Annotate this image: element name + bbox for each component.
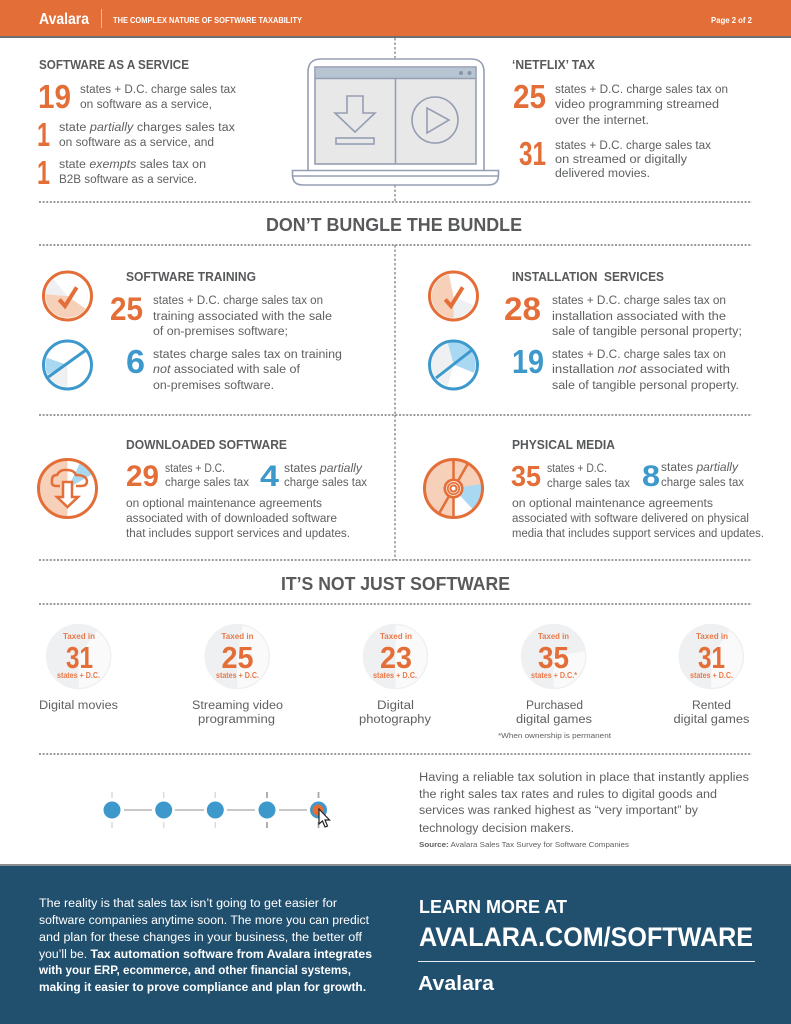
panel: software training: on-premises software. [153, 380, 274, 392]
call to action: AVALARA.COM/SOFTWARE [419, 922, 753, 952]
panel: software training: states + D.C. charge sales tax on [153, 295, 323, 307]
panel: physical media: 8 [642, 460, 660, 493]
panel: downloaded software: associated with of downloaded software [126, 513, 337, 525]
footer paragraph: you’ll be. Tax automation software from Avalara integrates [39, 949, 372, 961]
stat: streaming video programming: programming [198, 714, 275, 726]
footer logo: Avalara [418, 973, 495, 995]
text block: survey finding: services was ranked highest as “very important” by [419, 805, 698, 817]
panel: netflix tax [512, 58, 728, 180]
panel: physical media: PHYSICAL MEDIA [512, 438, 615, 452]
stat: streaming video programming [192, 624, 283, 726]
panel: downloaded software: states partially [284, 463, 363, 475]
panel: installation services: 19 [512, 343, 544, 380]
panel: installation services: sale of tangible personal property; [552, 326, 742, 338]
stat: purchased digital games: states + D.C.* [531, 670, 578, 680]
stat: digital photography [359, 624, 431, 726]
panel: software training: 6 [126, 343, 145, 380]
stat: rented digital games: Rented [692, 700, 731, 712]
footnote: *When ownership is permanent [498, 731, 612, 740]
stat: digital movies: states + D.C. [57, 670, 100, 680]
stat: rented digital games [674, 624, 750, 726]
stat: purchased digital games: digital games [516, 714, 592, 726]
panel: netflix tax: states + D.C. charge sales tax on [555, 84, 728, 96]
panel: software as a service: 1 [37, 155, 50, 192]
stat: streaming video programming: 25 [222, 640, 254, 675]
panel: installation services: states + D.C. charge sales tax on [552, 349, 726, 361]
panel: netflix tax: over the internet. [555, 115, 649, 127]
call to action [418, 896, 755, 962]
icon: selection dots with cursor [104, 792, 330, 828]
text block: survey finding: technology decision makers. [419, 823, 574, 835]
panel: downloaded software: charge sales tax [284, 477, 367, 489]
panel: software as a service: state exempts sales tax on [59, 159, 206, 171]
panel: installation services: installation not associated with [552, 364, 730, 376]
panel: physical media: on optional maintenance agreements [512, 498, 713, 510]
icon: not taxed pie with slash [430, 341, 478, 389]
stat: digital photography: photography [359, 714, 431, 726]
stat: rented digital games: states + D.C. [690, 670, 733, 680]
icon: taxed pie with check [44, 272, 92, 320]
icon: laptop with download and play [292, 59, 498, 185]
header logo: Avalara [39, 11, 89, 28]
panel: physical media: associated with software delivered on physical [512, 513, 749, 525]
stat: rented digital games: digital games [674, 714, 750, 726]
panel: installation services: 28 [504, 291, 541, 327]
stat: streaming video programming: Taxed in [222, 631, 254, 641]
panel: software training: SOFTWARE TRAINING [126, 270, 256, 284]
panel: installation services: installation associated with the [552, 311, 726, 323]
footer paragraph: and plan for these changes in your business, the better off [39, 932, 363, 944]
panel: downloaded software: on optional maintenance agreements [126, 498, 322, 510]
panel: physical media: states + D.C. [547, 463, 607, 475]
panel: physical media: media that includes support services and updates. [512, 528, 764, 540]
panel: downloaded software [38, 438, 367, 540]
stat: digital photography: Taxed in [380, 631, 412, 641]
heading: don't bungle the bundle: DON’T BUNGLE THE BUNDLE [266, 214, 522, 235]
panel: netflix tax: 31 [519, 136, 546, 173]
stat: streaming video programming: Streaming video [192, 700, 283, 712]
panel: physical media: states partially [661, 462, 739, 474]
stat: purchased digital games [498, 624, 612, 740]
stat: digital photography: states + D.C. [373, 670, 417, 680]
panel: downloaded software: charge sales tax [165, 477, 249, 489]
panel: downloaded software: states + D.C. [165, 463, 225, 475]
text block: survey finding [419, 772, 749, 849]
panel: software as a service: B2B software as a service. [59, 174, 197, 186]
panel: software as a service: states + D.C. charge sales tax [80, 84, 236, 96]
stat: digital movies: 31 [66, 640, 93, 675]
stat: rented digital games: 31 [698, 640, 725, 675]
panel: software as a service: on software as a service, and [59, 137, 214, 149]
panel: netflix tax: video programming streamed [555, 99, 719, 111]
stat: digital movies: Digital movies [39, 700, 118, 712]
panel: netflix tax: ‘NETFLIX’ TAX [512, 58, 596, 72]
stat: streaming video programming: states + D.C. [216, 670, 259, 680]
panel: installation services: states + D.C. charge sales tax on [552, 295, 726, 307]
icon: disc pie [424, 460, 482, 518]
text block: survey finding: Having a reliable tax solution in place that instantly applies [419, 772, 749, 784]
panel: software training: states charge sales tax on training [153, 349, 342, 361]
stat: digital photography: 23 [380, 640, 412, 675]
panel: software as a service [37, 58, 236, 192]
stat: purchased digital games: 35 [538, 640, 569, 675]
panel: physical media: charge sales tax [661, 477, 744, 489]
panel: netflix tax: 25 [513, 79, 546, 116]
header title: THE COMPLEX NATURE OF SOFTWARE TAXABILITY [113, 15, 302, 25]
stat: purchased digital games: Purchased [526, 700, 583, 712]
page number: Page 2 of 2 [711, 15, 752, 25]
panel: software as a service: SOFTWARE AS A SERVICE [39, 58, 189, 72]
panel: downloaded software: DOWNLOADED SOFTWARE [126, 438, 287, 452]
panel: software training: of on-premises software; [153, 326, 288, 338]
stat: purchased digital games: Taxed in [538, 631, 569, 641]
header bar [0, 0, 791, 38]
panel: netflix tax: states + D.C. charge sales tax [555, 140, 711, 152]
panel: downloaded software: that includes support services and updates. [126, 528, 350, 540]
heading: it's not just software: IT’S NOT JUST SOFTWARE [281, 573, 510, 594]
panel: software as a service: 1 [37, 117, 50, 154]
panel: software training: not associated with sale of [153, 364, 301, 376]
panel: installation services: INSTALLATION SERVICES [512, 270, 664, 284]
panel: downloaded software: 4 [260, 460, 279, 493]
text block: survey finding: the right sales tax rates and rules to digital goods and [419, 789, 717, 801]
panel: software training [44, 270, 342, 392]
footer panel [0, 864, 791, 1024]
footer paragraph: software companies anytime soon. The more you can predict [39, 915, 370, 927]
call to action: LEARN MORE AT [419, 896, 568, 917]
stat: rented digital games: Taxed in [696, 631, 728, 641]
panel: physical media [424, 438, 764, 540]
stat: digital movies: Taxed in [63, 631, 95, 641]
panel: installation services: sale of tangible personal property. [552, 380, 739, 392]
panel: physical media: 35 [511, 461, 541, 493]
panel: installation services [430, 270, 742, 392]
icon: cloud download pie [38, 460, 96, 518]
footer paragraph: The reality is that sales tax isn’t going to get easier for [39, 898, 337, 910]
footer paragraph: with your ERP, ecommerce, and other financial systems, [38, 965, 351, 977]
panel: downloaded software: 29 [126, 460, 159, 493]
panel: software as a service: 19 [38, 79, 71, 116]
stat: digital photography: Digital [377, 700, 414, 712]
panel: netflix tax: delivered movies. [555, 168, 650, 180]
source note: Source: Avalara Sales Tax Survey for Software Companies [419, 840, 629, 849]
panel: software training: training associated with the sale [153, 311, 332, 323]
panel: netflix tax: on streamed or digitally [555, 154, 687, 166]
footer paragraph [38, 898, 372, 994]
footer paragraph: making it easier to prove compliance and plan for growth. [39, 982, 366, 994]
panel: software as a service: state partially charges sales tax [59, 122, 235, 134]
panel: physical media: charge sales tax [547, 478, 630, 490]
stat: digital movies [39, 624, 118, 712]
icon: not taxed pie with slash [44, 341, 92, 389]
panel: software training: 25 [110, 291, 143, 327]
icon: taxed pie with check [430, 272, 478, 320]
panel: software as a service: on software as a service, [80, 99, 212, 111]
